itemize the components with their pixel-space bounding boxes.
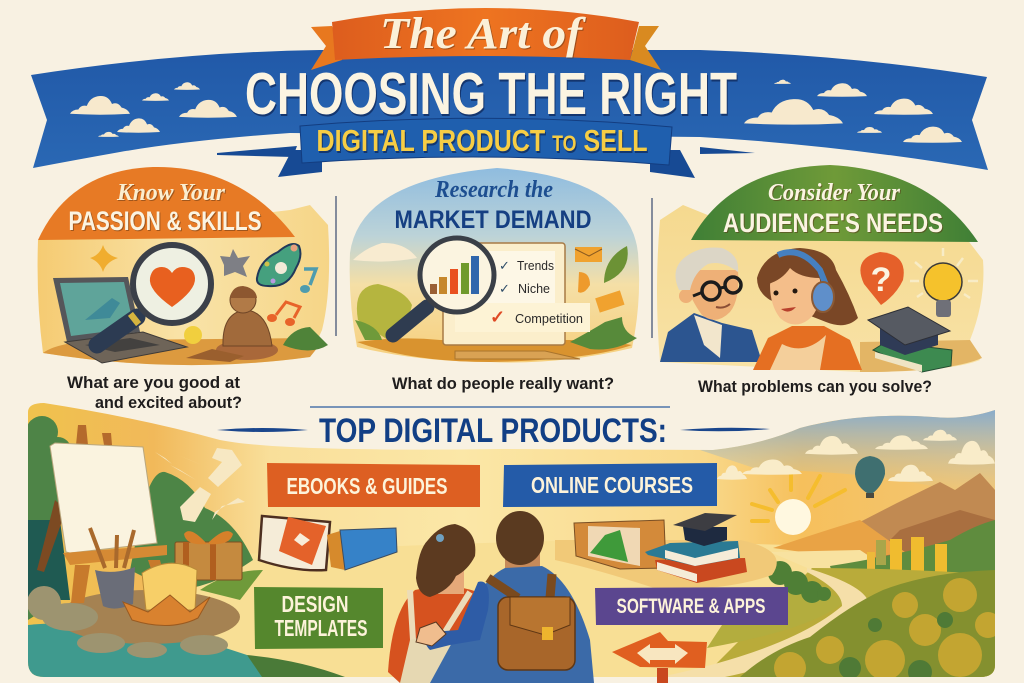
icon: magnifier heart	[97, 245, 211, 345]
icon: magnifier chart	[393, 238, 494, 335]
monitor checklist: Competition	[515, 311, 583, 326]
heading: AUDIENCE'S NEEDS	[723, 208, 943, 238]
icon: gift box	[175, 531, 242, 580]
illustration: older man	[660, 247, 762, 362]
heading	[68, 180, 262, 236]
bushes	[355, 284, 637, 350]
subtitle text: DIGITAL PRODUCT TO SELL	[316, 123, 648, 158]
panel: top digital products scene	[22, 400, 1001, 683]
forest bushes	[774, 578, 1001, 683]
scene clouds	[717, 430, 995, 482]
caption: passion	[67, 373, 242, 412]
heading	[723, 180, 943, 238]
icon: pot with brushes	[90, 528, 135, 609]
title: the art of: The Art of	[380, 9, 587, 58]
city bars	[867, 537, 947, 572]
tag: design templates: DESIGN	[282, 591, 348, 617]
stones	[27, 586, 228, 658]
clouds on ribbon	[70, 80, 962, 143]
heading: MARKET DEMAND	[394, 206, 592, 234]
tag: online courses	[503, 463, 717, 507]
monitor checklist: ✓	[490, 307, 505, 327]
heading: top digital products	[217, 407, 770, 450]
icon: candle in lotus	[123, 563, 210, 626]
balloon	[855, 456, 885, 498]
subtitle ribbon	[278, 118, 695, 178]
tree line	[830, 520, 995, 572]
caption: market: What do people really want?	[392, 374, 614, 393]
monitor checklist: Trends	[517, 258, 554, 273]
caption: audience: What problems can you solve?	[698, 377, 932, 396]
heading: Research the	[434, 177, 553, 203]
icon: envelopes and leaf	[575, 246, 628, 313]
tag: ebooks	[267, 463, 480, 507]
hills and road	[700, 568, 1000, 680]
icon: question bubble: ?	[871, 261, 891, 299]
tag: online courses: ONLINE COURSES	[531, 472, 693, 498]
icon: lightbulb	[910, 248, 978, 317]
heading: PASSION & SKILLS	[68, 206, 262, 236]
top ribbon	[311, 8, 661, 70]
man	[416, 511, 594, 683]
icon: seated figure	[184, 286, 328, 362]
caption: passion: What are you good at	[67, 373, 240, 392]
left forest	[28, 416, 69, 503]
panel: passion and skills	[38, 167, 329, 365]
icon: question bubble	[860, 252, 904, 305]
icon: box and books with cap	[574, 513, 747, 583]
ground	[196, 542, 808, 677]
heading: Consider Your	[768, 180, 901, 206]
woman	[388, 524, 490, 683]
illustration: couple	[388, 511, 594, 683]
backpack	[488, 574, 575, 670]
icon: laptop	[53, 277, 187, 363]
monitor checklist: Niche	[518, 281, 550, 296]
books shadow	[555, 540, 777, 590]
mountains	[862, 473, 995, 541]
heading	[394, 177, 592, 234]
illustration: woman with headset	[753, 248, 862, 370]
monitor checklist: ✓	[499, 281, 510, 296]
tag: design templates: TEMPLATES	[274, 615, 368, 641]
banner ribbon	[31, 50, 988, 170]
platform and pond	[28, 623, 268, 680]
icon: star and palette	[90, 244, 300, 286]
tag: design templates	[254, 587, 383, 649]
sky shapes: arrows and birds	[155, 448, 245, 522]
right blue sky	[700, 410, 995, 488]
tag: ebooks: EBOOKS & GUIDES	[286, 473, 448, 499]
heading: top digital products: TOP DIGITAL PRODUCTS:	[319, 412, 667, 450]
title: CHOOSING THE RIGHT	[245, 61, 737, 127]
illustration: easel and canvas	[37, 425, 167, 603]
panel dividers	[336, 196, 652, 338]
icon: graduation cap on book	[868, 307, 952, 372]
panel: market demand	[350, 168, 639, 362]
illustration: road sign	[612, 632, 707, 683]
sun	[752, 473, 845, 535]
icon: music notes	[267, 269, 316, 326]
caption: passion: and excited about?	[95, 393, 242, 412]
panel: audience needs	[657, 165, 983, 372]
heading: Know Your	[116, 180, 226, 206]
tag: software and apps: SOFTWARE & APPS	[616, 595, 766, 618]
icon: ebook and blue book	[259, 516, 397, 570]
monitor checklist: ✓	[499, 258, 510, 273]
monitor checklist	[443, 243, 590, 359]
tag: software and apps	[595, 587, 788, 625]
